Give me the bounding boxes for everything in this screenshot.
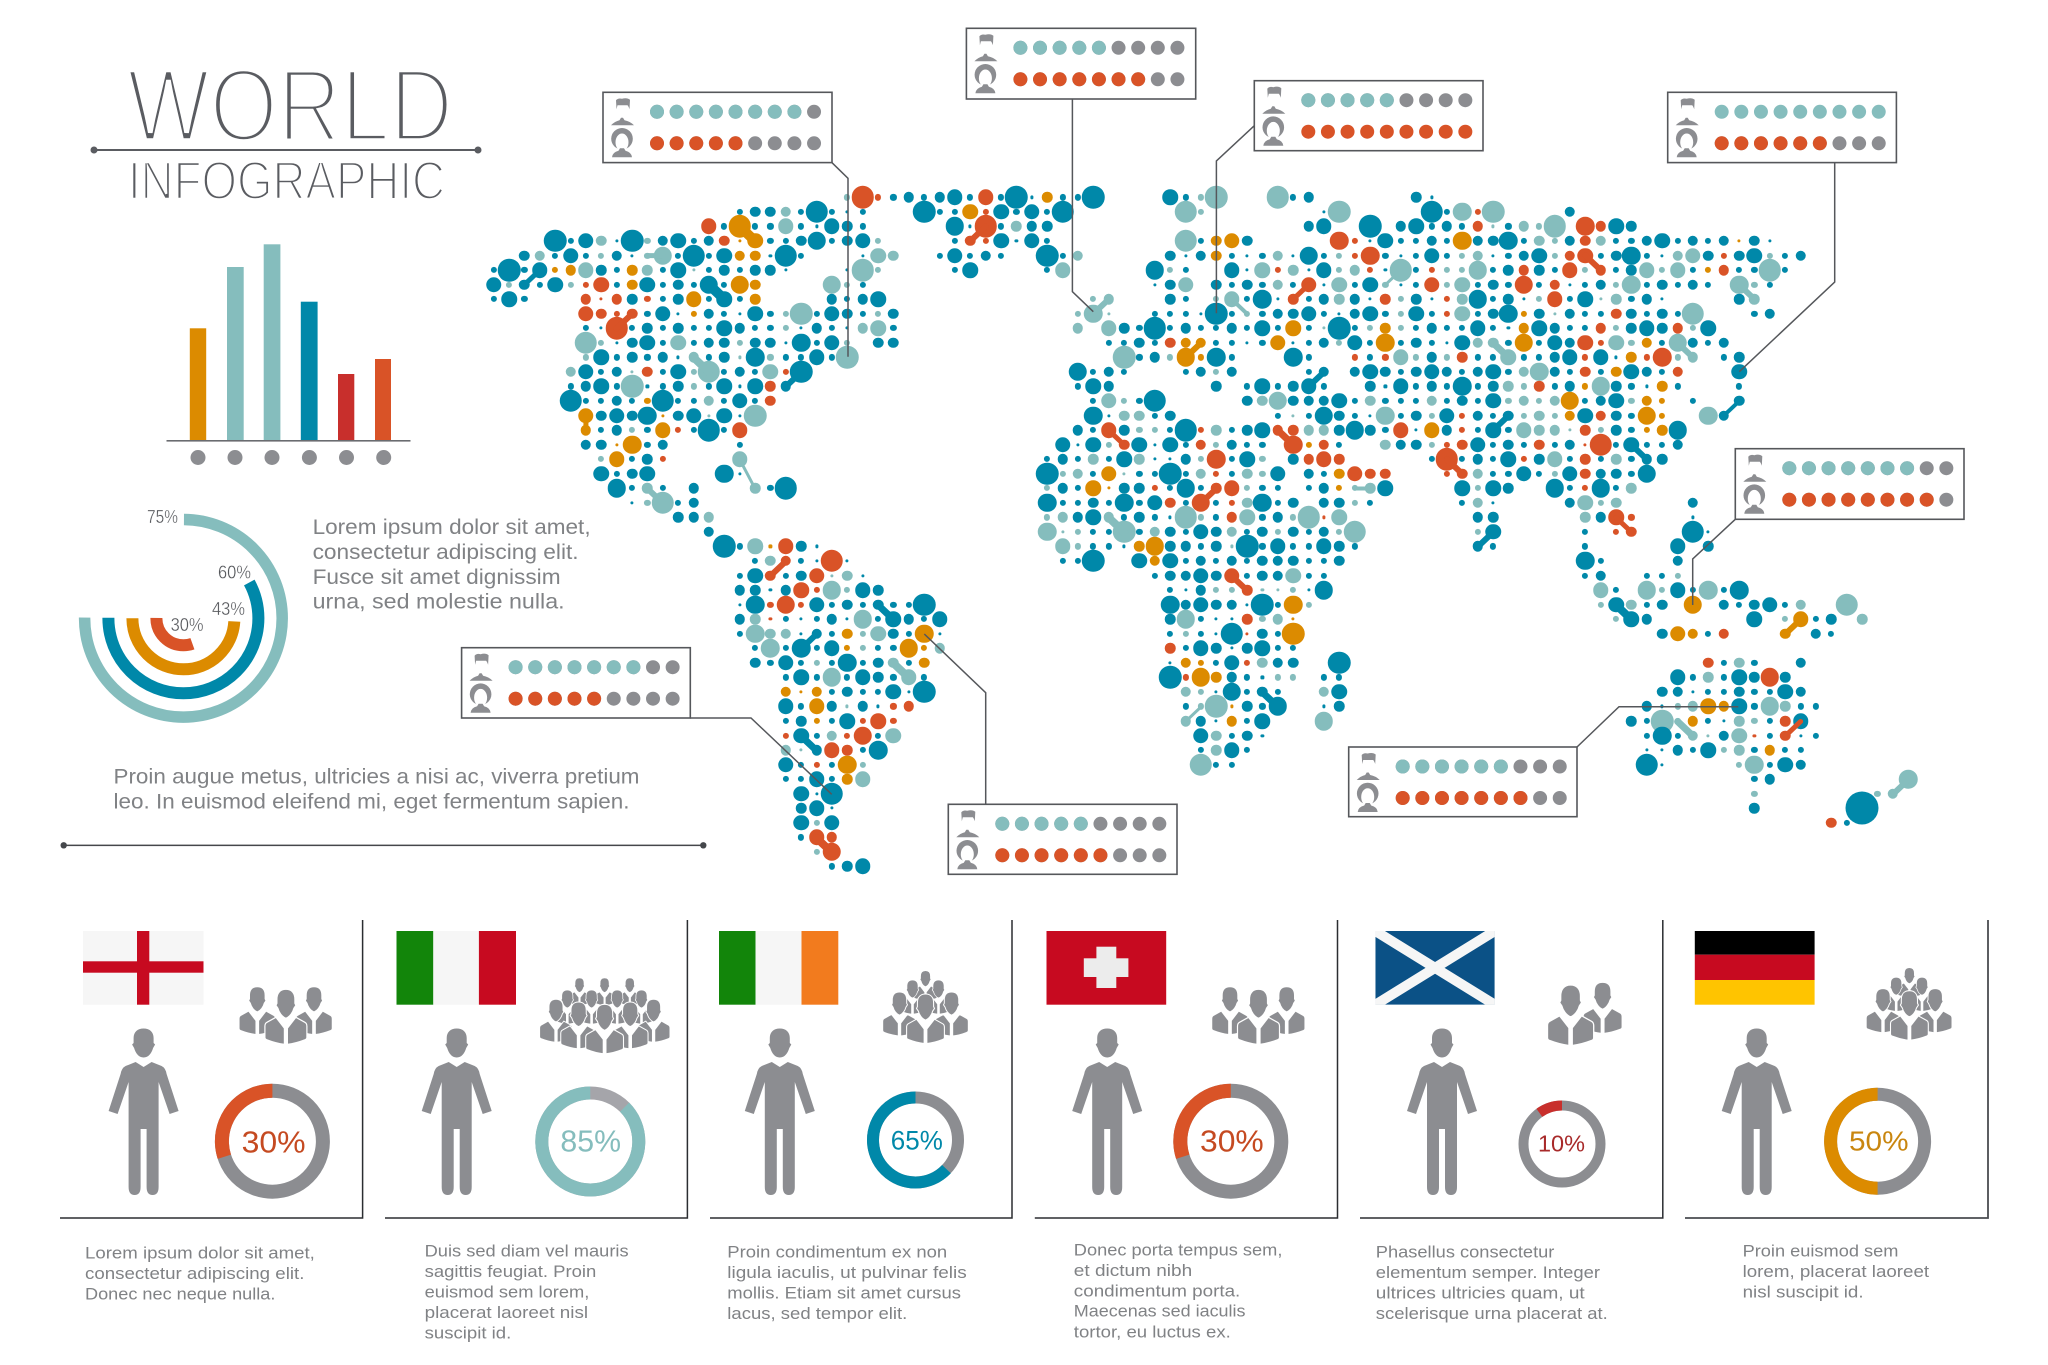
section rule	[60, 842, 706, 848]
caption: et dictum nibh	[1074, 1261, 1192, 1280]
group icon: six people	[1866, 968, 1952, 1040]
blob connectors between merged map dots	[524, 226, 1908, 853]
caption: suscipit id.	[425, 1323, 511, 1342]
caption: condimentum porta.	[1074, 1281, 1240, 1300]
callout: South America	[462, 648, 690, 718]
caption: placerat laoreet nisl	[425, 1303, 588, 1322]
donut: 50%	[1831, 1094, 1925, 1188]
donut: 30%	[222, 1091, 323, 1192]
panel: England	[60, 920, 363, 1303]
panel: Italy	[385, 920, 687, 1342]
caption: lacus, sed tempor elit.	[727, 1304, 907, 1323]
callout: Russia	[1668, 92, 1896, 163]
flag: Italy	[396, 931, 516, 1005]
caption: Donec porta tempus sem,	[1074, 1241, 1282, 1260]
donut: 85%	[542, 1093, 639, 1190]
title	[90, 48, 482, 211]
caption: consectetur adipiscing elit.	[85, 1264, 304, 1283]
caption: nisl suscipit id.	[1743, 1282, 1864, 1301]
callout: North America	[603, 92, 832, 163]
caption: Proin condimentum ex non	[727, 1243, 947, 1262]
text block: summary: leo. In euismod eleifend mi, eget fermentum sapien.	[114, 790, 630, 813]
title: WORLD	[127, 48, 453, 164]
callout: Scandinavia	[1254, 81, 1483, 151]
caption: Duis sed diam vel mauris	[425, 1242, 629, 1261]
callout: Greenland	[966, 28, 1196, 99]
callout: South-East Asia	[1735, 449, 1964, 519]
caption	[1743, 1242, 1929, 1301]
text block: intro: consectetur adipiscing elit.	[313, 541, 579, 564]
caption	[727, 1243, 967, 1323]
donut: 10%	[1524, 1106, 1600, 1182]
caption: tortor, eu luctus ex.	[1074, 1322, 1231, 1341]
text block: intro	[313, 516, 591, 614]
donut: 30%: 30%	[1200, 1124, 1264, 1159]
bar chart	[166, 244, 410, 465]
donut: 10%: 10%	[1538, 1131, 1585, 1157]
radial progress chart: 60%	[218, 563, 251, 583]
caption	[85, 1243, 315, 1303]
radial progress chart: 43%	[212, 599, 245, 619]
group icon: three people	[1212, 987, 1305, 1044]
caption: ligula iaculis, ut pulvinar felis	[727, 1263, 967, 1282]
caption: sagittis feugiat. Proin	[425, 1262, 596, 1281]
person figure	[1407, 1028, 1477, 1195]
callout: Australia	[1349, 747, 1577, 817]
panel: Germany	[1685, 920, 1988, 1301]
caption: Phasellus consectetur	[1376, 1243, 1555, 1262]
world dot map	[486, 186, 1918, 874]
text block: intro: Lorem ipsum dolor sit amet,	[313, 516, 591, 539]
title: INFOGRAPHIC	[128, 151, 445, 211]
text block: intro: Fusce sit amet dignissim	[313, 566, 561, 589]
caption: Maecenas sed iaculis	[1074, 1302, 1246, 1321]
person figure	[1072, 1028, 1142, 1195]
flag: Scotland	[1375, 931, 1495, 1005]
group icon: two people	[1548, 982, 1622, 1046]
flag: Germany	[1695, 931, 1815, 1005]
person figure	[422, 1028, 492, 1195]
text block: summary	[114, 765, 640, 813]
caption: Proin euismod sem	[1743, 1242, 1898, 1261]
caption: lorem, placerat laoreet	[1743, 1262, 1929, 1281]
person figure	[745, 1028, 815, 1195]
person figure	[109, 1028, 179, 1195]
group icon: three people	[239, 987, 332, 1044]
panel: Scotland	[1360, 920, 1663, 1323]
flag: Ireland	[719, 931, 838, 1005]
panel: Switzerland	[1035, 920, 1338, 1341]
caption: euismod sem lorem,	[425, 1282, 589, 1301]
donut: 65%	[873, 1098, 958, 1182]
donut: 85%: 85%	[560, 1124, 621, 1159]
flag: Switzerland	[1046, 931, 1166, 1005]
donut: 30%	[1180, 1091, 1281, 1192]
radial progress chart: 30%	[171, 615, 204, 635]
caption: Donec nec neque nulla.	[85, 1284, 275, 1303]
radial progress chart	[85, 507, 282, 717]
caption: ultrices ultricies quam, ut	[1376, 1283, 1585, 1302]
caption	[1074, 1241, 1282, 1341]
callout: Brazil	[948, 804, 1177, 874]
caption	[1376, 1243, 1608, 1323]
group icon: six people	[883, 971, 968, 1044]
caption: Lorem ipsum dolor sit amet,	[85, 1243, 315, 1262]
radial progress chart: 75%	[147, 507, 178, 527]
panel: Ireland	[710, 920, 1012, 1323]
donut: 50%: 50%	[1849, 1126, 1908, 1157]
leader lines from callouts to map	[690, 99, 1835, 804]
caption: scelerisque urna placerat at.	[1376, 1304, 1608, 1323]
donut: 30%: 30%	[242, 1124, 306, 1159]
flag: England	[83, 931, 204, 1005]
donut: 65%: 65%	[891, 1125, 943, 1155]
caption: elementum semper. Integer	[1376, 1263, 1600, 1282]
text block: summary: Proin augue metus, ultricies a nisi ac, viverra pretium	[114, 765, 640, 788]
caption: mollis. Etiam sit amet cursus	[727, 1283, 961, 1302]
caption	[425, 1242, 629, 1342]
text block: intro: urna, sed molestie nulla.	[313, 591, 565, 614]
group icon: large crowd	[540, 978, 670, 1054]
person figure	[1722, 1028, 1792, 1195]
title rule	[90, 146, 482, 154]
